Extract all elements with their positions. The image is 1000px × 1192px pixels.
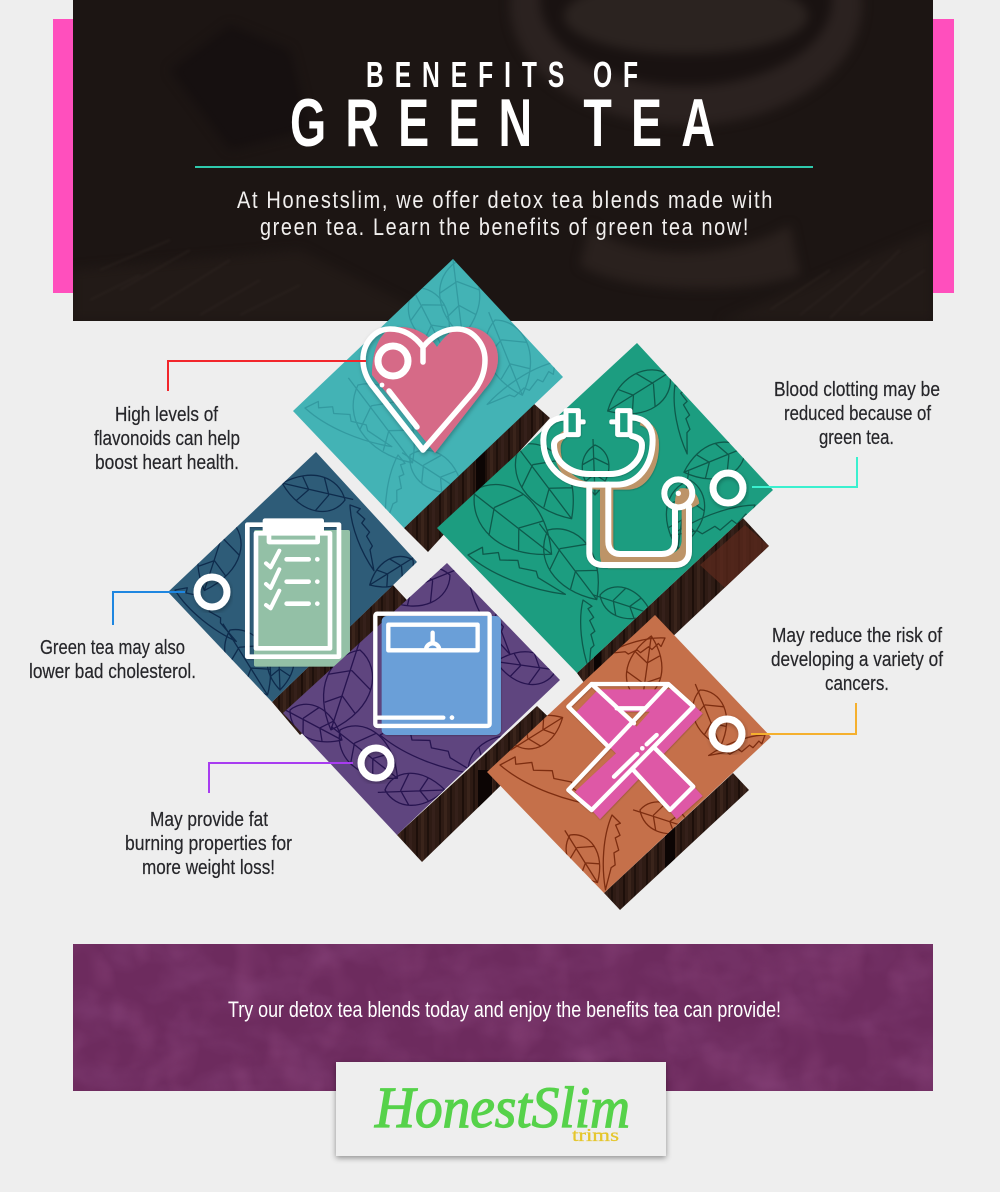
callout text: weight loss: more weight loss! [142,856,275,879]
callout text: cancers: May reduce the risk of [772,624,942,647]
icon: clipboard [247,521,350,667]
icon: awareness ribbon [568,684,703,819]
title: Benefits of: BENEFITS OF [366,54,649,95]
title: Green Tea: GREEN TEA [290,85,734,161]
callout text: weight loss [125,808,292,879]
callout line: ribbon [751,703,856,734]
logo card [336,1062,666,1156]
callout text: heart: High levels of [115,403,218,426]
callout text: weight loss: burning properties for [125,832,292,855]
callout text: cancers [771,624,943,695]
right pink accent bar [933,19,954,293]
leaf pattern: orange [497,633,768,891]
intro text: At Honestslim, we offer detox tea blends made with [237,187,774,214]
panel: green stethoscope diamond [437,343,773,673]
leaf pattern: purple [286,568,554,806]
callout text: blood clotting: green tea. [819,426,894,449]
ring marker: green [713,473,743,503]
callout line: clipboard [113,592,185,625]
panel: header with tea cup photo [73,0,933,321]
panel: orange ribbon diamond [487,615,771,893]
banner text: Try our detox tea blends today and enjoy the benefits tea can provide! [228,997,781,1022]
callout text: blood clotting: Blood clotting may be [774,378,940,401]
callout text: cancers: developing a variety of [771,648,943,671]
callout text: blood clotting [774,378,940,449]
callout text: weight loss: May provide fat [150,808,268,831]
callout text: cancers: cancers. [825,672,889,695]
leaf pattern: green [467,369,756,664]
panel: navy clipboard diamond [168,452,425,705]
callout text: cholesterol: Green tea may also [40,636,185,659]
ring marker: orange [712,719,742,749]
callout text: cholesterol [29,636,196,683]
panel: purple call-to-action banner [73,944,933,1091]
logo subtext: trims [572,1125,619,1145]
ring marker: purple [361,748,391,778]
icon: stethoscope [543,411,699,568]
ring marker: navy [197,577,227,607]
panel: teal heart diamond [293,251,563,528]
callout text: cholesterol: lower bad cholesterol. [29,660,196,683]
leaf pattern: navy [174,474,414,696]
left pink accent bar [53,19,73,293]
icon: weight scale [375,614,501,735]
leaf pattern: teal [302,251,561,526]
callout line: heart [168,361,366,391]
intro text [237,187,774,241]
icon: heart [363,327,498,453]
logo wordmark: HonestSlim [374,1075,630,1140]
callout text: blood clotting: reduced because of [784,402,931,425]
callout line: scale [209,763,353,793]
callout text: heart: flavonoids can help [94,427,240,450]
panel: purple scale diamond [276,555,565,835]
teal divider line [195,166,813,168]
callout text: heart: boost heart health. [95,451,239,474]
wood backing strips [260,400,770,915]
callout line: stethoscope [752,457,857,487]
callout text: heart [94,403,240,474]
intro text: green tea. Learn the benefits of green tea now! [260,214,750,241]
